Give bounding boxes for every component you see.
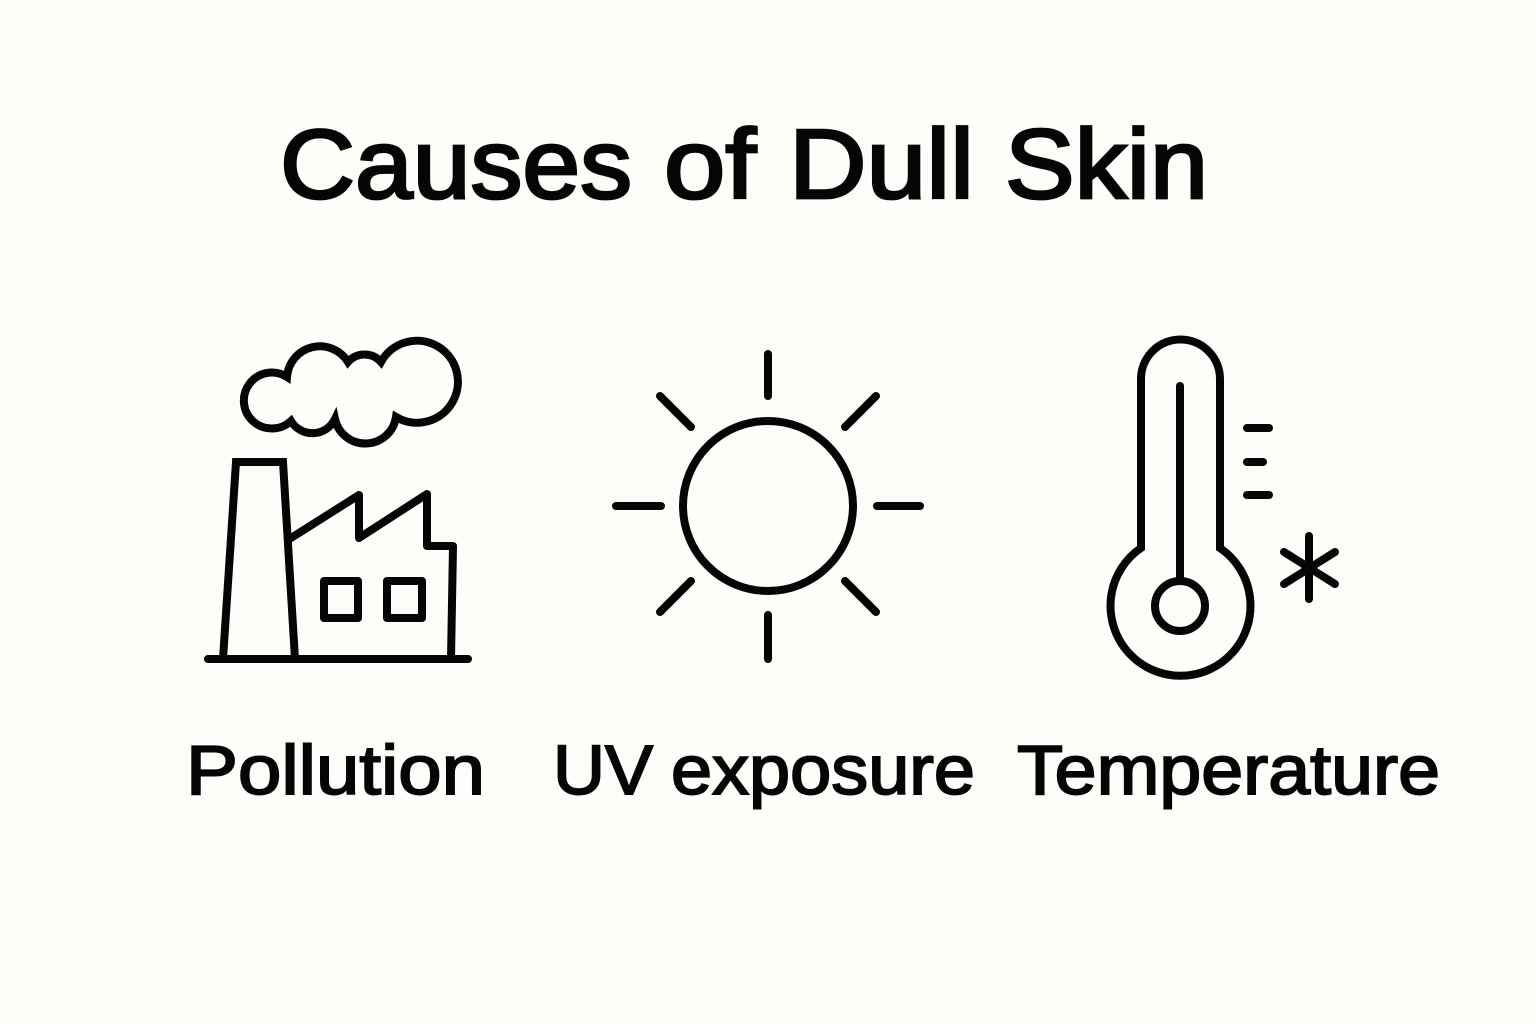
factory building: [291, 494, 453, 659]
thermometer bulb: [1155, 581, 1205, 631]
title: of: [664, 109, 757, 219]
label: UV exposure: UV: [553, 731, 653, 809]
icon: factory with smoke cloud: [208, 341, 468, 659]
title: [280, 109, 1208, 219]
title: Causes: [280, 109, 632, 219]
label: UV exposure: [553, 731, 975, 809]
label: UV exposure: exposure: [671, 731, 975, 809]
chimney: [223, 462, 295, 659]
thermometer outline: [1110, 340, 1250, 676]
mercury line: [1176, 386, 1184, 580]
window right: [387, 581, 422, 618]
label: Pollution: Pollution: [186, 731, 485, 809]
snowflake: [1284, 536, 1335, 599]
label: Temperature: Temperature: [1017, 731, 1440, 809]
window left: [324, 581, 358, 618]
title: Skin: [1005, 109, 1208, 219]
icon: sun: [616, 354, 920, 659]
title: Dull: [789, 109, 974, 219]
smoke cloud: [244, 341, 458, 444]
icon: thermometer with snowflake: [1110, 340, 1335, 676]
ground line: [208, 655, 468, 663]
scale ticks: [1247, 428, 1269, 495]
